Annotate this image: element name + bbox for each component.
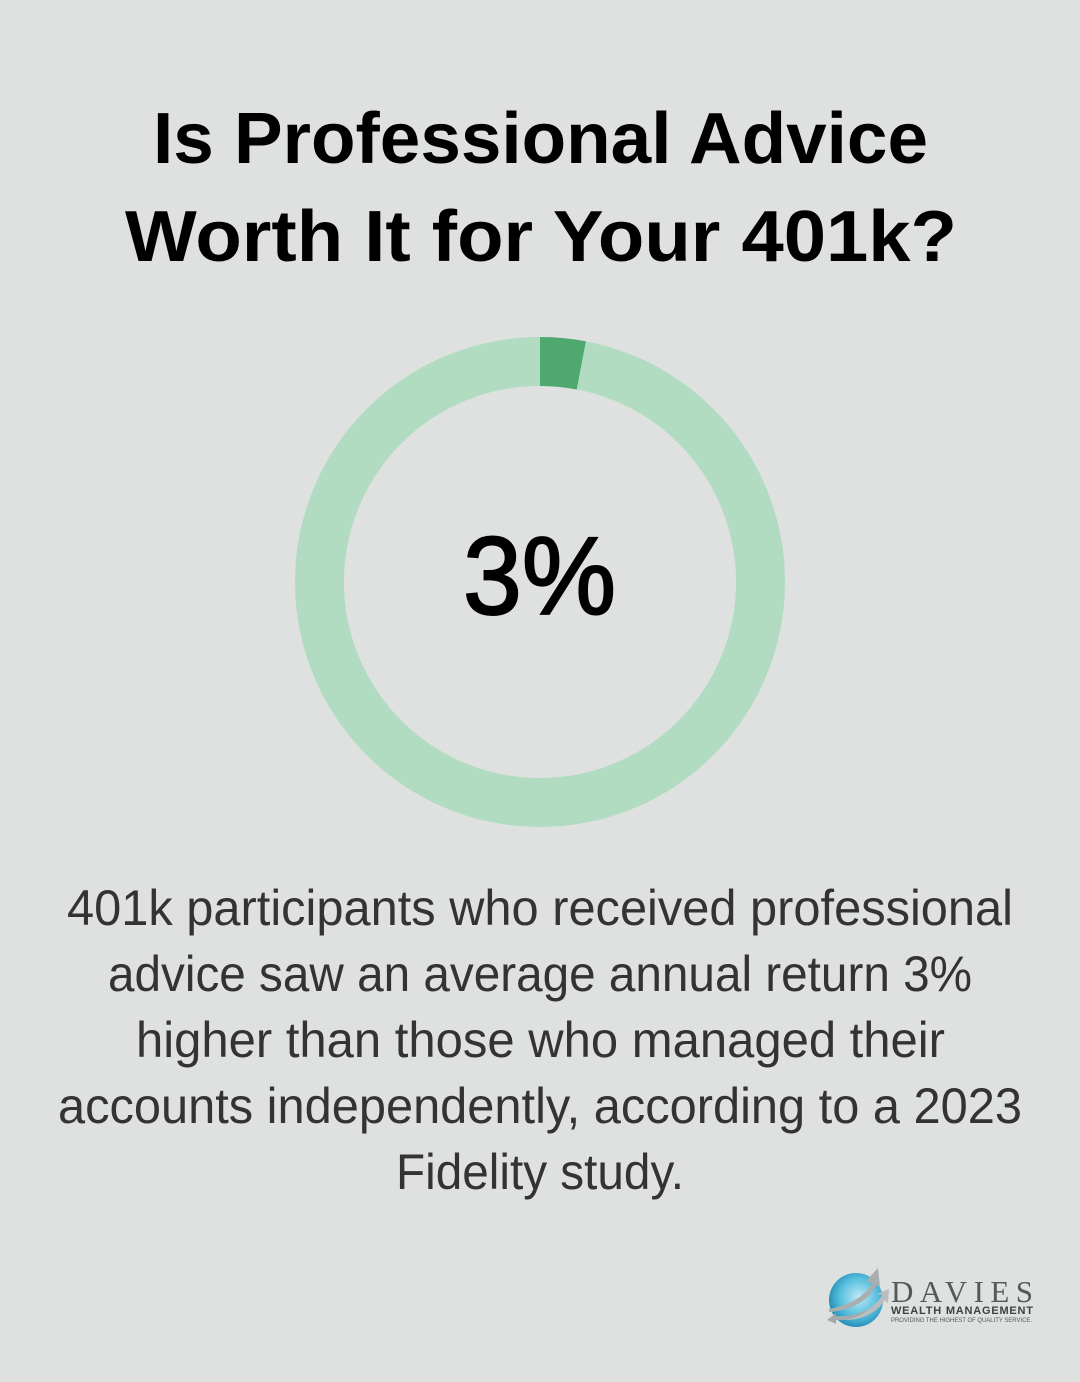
title: Is Professional Advice	[153, 99, 928, 179]
logo: Davies Wealth Management	[827, 1268, 1033, 1327]
donut chart: 3%	[320, 337, 760, 802]
logo wordmark: DAVIES	[891, 1274, 1033, 1309]
logo tagline: PROVIDING THE HIGHEST OF QUALITY SERVICE.	[891, 1317, 1032, 1324]
title: Worth It for Your 401k?	[125, 197, 957, 277]
title	[125, 99, 957, 277]
donut track	[320, 362, 760, 802]
donut center value: 3%	[463, 515, 616, 638]
icon: globe with arrows	[827, 1268, 889, 1327]
description text	[58, 880, 1022, 1200]
description text: Fidelity study.	[396, 1144, 684, 1200]
description text: advice saw an average annual return 3%	[108, 946, 972, 1002]
donut highlighted segment	[540, 337, 586, 390]
description text: 401k participants who received professional	[67, 880, 1013, 936]
logo subtitle: WEALTH MANAGEMENT	[891, 1305, 1033, 1317]
description text: higher than those who managed their	[136, 1012, 945, 1068]
description text: accounts independently, according to a 2023	[58, 1078, 1022, 1134]
